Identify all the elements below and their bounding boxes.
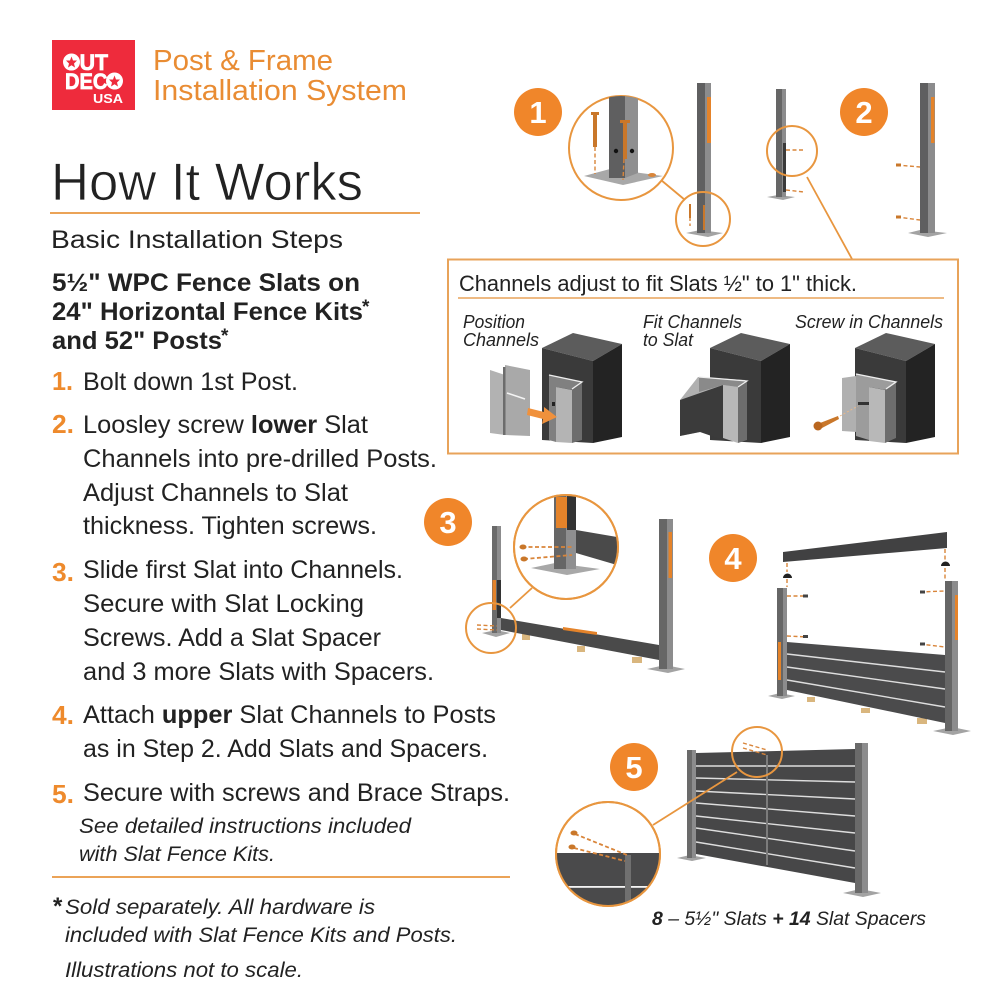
drawing: fit channels to slat	[680, 333, 790, 443]
subtitle: Post & Frame Installation System: Installation System	[153, 75, 407, 107]
step 3 text: Slide first Slat into Channels.	[83, 556, 403, 584]
badge 1	[514, 88, 562, 136]
step 1 text: Bolt down 1st Post.	[83, 368, 298, 396]
badge 3	[424, 498, 472, 546]
step 2 text: thickness. Tighten screws.	[83, 512, 377, 540]
label: screw in channels: Screw in Channels	[795, 311, 943, 332]
badge 3: 3	[439, 505, 457, 540]
logo: Outdeco USA: USA	[93, 91, 124, 106]
note: detailed instructions: with Slat Fence Kits.	[79, 843, 275, 866]
bold kit heading: *	[221, 326, 229, 347]
label: position channels	[463, 311, 539, 350]
badge 4	[709, 534, 757, 582]
label: position channels: Position	[463, 311, 525, 332]
bold kit heading: 5½" WPC Fence Slats on	[52, 269, 360, 297]
footnote: included with Slat Fence Kits and Posts.	[65, 924, 457, 947]
subtitle: Post & Frame Installation System: Post & Frame	[153, 45, 333, 77]
panel heading: Channels adjust to fit Slats ½" to 1" thick.	[459, 271, 857, 296]
step 3 text	[52, 556, 434, 686]
heading: Basic Installation Steps: Basic Installation Steps	[51, 226, 343, 254]
drawing: screw in channels	[814, 333, 935, 443]
badge 5: 5	[625, 750, 643, 785]
badge 4: 4	[724, 541, 742, 576]
step 5 text: 5.	[52, 779, 74, 809]
footnote	[53, 893, 457, 982]
badge 5	[610, 743, 658, 791]
step 3 text: Secure with Slat Locking	[83, 590, 364, 618]
step 1 text: 1.	[52, 366, 73, 396]
step 3 text: Screws. Add a Slat Spacer	[83, 624, 381, 652]
step 2 text: Channels into pre-drilled Posts.	[83, 445, 437, 473]
illustration: step 4 upper slat	[768, 532, 971, 735]
illustration: step 2 large post	[896, 83, 947, 237]
step 4 text: 4.	[52, 700, 74, 730]
note: detailed instructions: See detailed instructions included	[79, 815, 412, 838]
logo: Outdeco USA	[52, 40, 135, 110]
label: position channels: Channels	[463, 329, 539, 350]
step 2 text: Adjust Channels to Slat	[83, 479, 348, 507]
label: fit channels to slat: Fit Channels	[643, 311, 742, 332]
logo: Outdeco USA: OUT	[63, 50, 108, 75]
illustration: step 3 first slat	[466, 490, 685, 673]
step 4 text: as in Step 2. Add Slats and Spacers.	[83, 735, 488, 763]
step 5 text: Secure with screws and Brace Straps.	[83, 779, 510, 807]
step 4 text	[52, 700, 496, 763]
step 2 text	[52, 409, 437, 540]
illustration: step 1 post with detail circles	[569, 83, 730, 246]
illustration: step 2 small post with channels	[767, 89, 817, 200]
bold kit heading: 24" Horizontal Fence Kits	[52, 298, 363, 326]
step 3 text: and 3 more Slats with Spacers.	[83, 658, 434, 686]
label: fit channels to slat: to Slat	[643, 329, 694, 350]
badge 1: 1	[529, 95, 547, 130]
drawing: position channels	[490, 333, 622, 443]
footnote: *	[53, 893, 63, 920]
bold kit heading: and 52" Posts	[52, 327, 222, 355]
subtitle: Post & Frame Installation System	[153, 45, 407, 107]
footnote: Sold separately. All hardware is	[65, 896, 376, 919]
illustration: step 5 finished fence	[550, 727, 881, 913]
title: How It Works: How It Works	[51, 153, 363, 212]
footnote: Illustrations not to scale.	[65, 959, 303, 982]
badge 2	[840, 88, 888, 136]
bold kit heading	[52, 269, 370, 355]
note: detailed instructions	[79, 815, 412, 866]
leader line to channels panel	[807, 177, 852, 259]
badge 2: 2	[855, 95, 873, 130]
step 2 text: Loosley screw lower Slat	[83, 411, 368, 439]
step 3 text: 3.	[52, 557, 74, 587]
step 4 text: Attach upper Slat Channels to Posts	[83, 701, 496, 729]
caption: slats and spacers: 8 – 5½" Slats + 14 Slat Spacers	[652, 909, 927, 930]
step 2 text: 2.	[52, 409, 74, 439]
label: fit channels to slat	[643, 311, 742, 350]
bold kit heading: *	[362, 297, 370, 318]
panel: channels adjust	[448, 260, 958, 454]
logo: Outdeco USA: DECO	[65, 69, 123, 94]
